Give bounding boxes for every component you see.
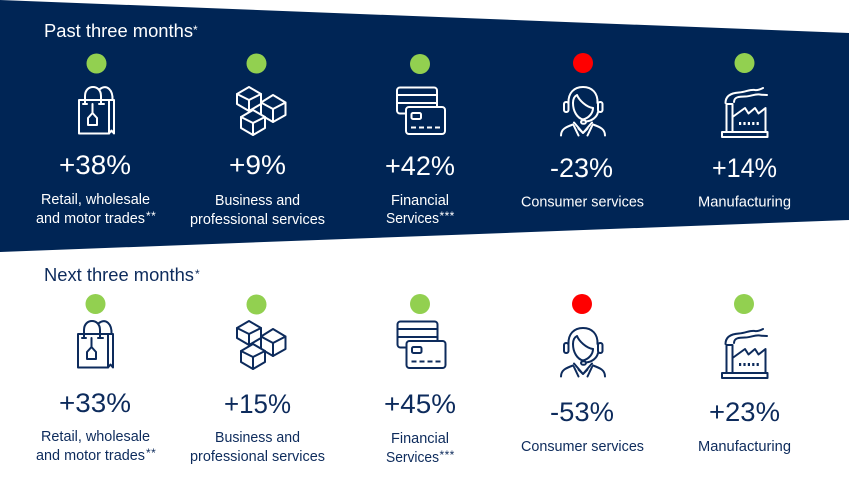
label: ** [146, 209, 156, 223]
label: Consumer services [521, 194, 644, 210]
value: -23% [550, 153, 613, 183]
icon: shopping bag [78, 321, 113, 368]
column: business and professional services [190, 294, 325, 465]
banner background [0, 0, 849, 252]
label: Business and [215, 193, 300, 209]
heading: next three months: Next three months [44, 265, 194, 285]
label: Services [386, 211, 439, 227]
heading: past three months: * [193, 23, 198, 37]
panel: past three months [0, 0, 849, 252]
status dot: green [410, 54, 430, 74]
icon: factory [722, 88, 768, 137]
panel: next three months [36, 265, 791, 466]
value: +33% [59, 388, 131, 418]
column: retail, wholesale and motor trades [36, 54, 156, 227]
status dot: green [734, 294, 754, 314]
status dot: green [734, 53, 754, 73]
value: +15% [224, 389, 291, 419]
label: Manufacturing [698, 194, 791, 210]
icon: headset agent [561, 328, 605, 376]
value: +42% [385, 151, 455, 181]
value: +9% [229, 150, 286, 180]
icon: credit cards [397, 88, 445, 134]
label: *** [440, 209, 455, 223]
icon: factory [722, 329, 768, 378]
column: retail, wholesale and motor trades [36, 294, 156, 464]
column: financial services [384, 294, 456, 466]
label: Consumer services [521, 439, 644, 455]
icon: headset agent [561, 87, 605, 136]
icon: boxes [237, 87, 286, 135]
icon: shopping bag [79, 87, 114, 134]
column: consumer services [521, 53, 644, 210]
value: +23% [709, 397, 780, 427]
value: +14% [712, 153, 777, 183]
label: Financial [391, 431, 449, 447]
status dot: red [572, 294, 592, 314]
label: Retail, wholesale [41, 192, 150, 208]
heading: past three months: Past three months [44, 21, 193, 41]
status dot: red [573, 53, 593, 73]
column: consumer services [521, 294, 644, 455]
label: Manufacturing [698, 439, 791, 455]
status dot: green [86, 294, 106, 314]
label: Services [386, 450, 439, 466]
column: manufacturing [698, 294, 791, 455]
label: and motor trades [36, 211, 145, 227]
label: and motor trades [36, 448, 145, 464]
column: financial services [385, 54, 455, 227]
value: +45% [384, 389, 456, 419]
label: professional services [190, 212, 325, 228]
heading: next three months: * [195, 267, 200, 281]
label: *** [440, 448, 455, 462]
column: manufacturing [698, 53, 791, 210]
label: professional services [190, 449, 325, 465]
status dot: green [410, 294, 430, 314]
label: ** [146, 446, 156, 460]
label: Retail, wholesale [41, 429, 150, 445]
label: Financial [391, 193, 449, 209]
status dot: green [246, 54, 266, 74]
value: +38% [59, 150, 131, 180]
icon: credit cards [398, 322, 446, 368]
label: Business and [215, 430, 300, 446]
status dot: green [246, 294, 266, 314]
icon: boxes [237, 321, 286, 369]
status dot: green [86, 54, 106, 74]
value: -53% [550, 397, 614, 427]
column: business and professional services [190, 54, 325, 228]
